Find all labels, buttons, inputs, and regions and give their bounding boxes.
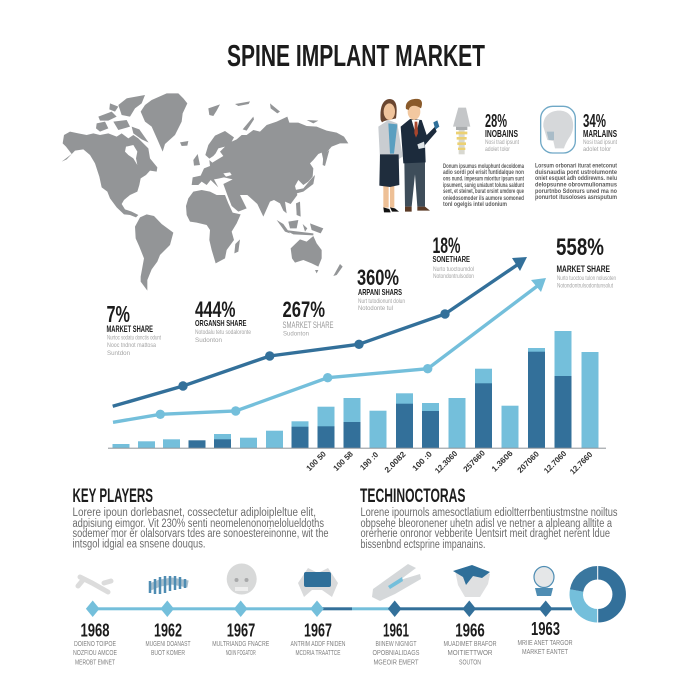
stat: 360%: ARPANI SHARS (358, 287, 402, 297)
milestone: 1968: NOZFIOU AMCOE (73, 648, 117, 657)
stat: 34%: adolet tolor (583, 146, 612, 153)
stat: 558%: Nurto tuoctou tulon nolusoten (557, 275, 616, 282)
stat: 558% (556, 234, 616, 290)
panel: key players: KEY PLAYERS (72, 486, 153, 507)
stat: 7%: Nooc tndnot mattosa (107, 342, 156, 349)
x-axis labels: 12.3060 (433, 449, 460, 475)
milestone: 1967: MULTRIANDG FNACRE (212, 639, 269, 648)
text block: implant description (443, 164, 524, 208)
illustration: two business people (378, 99, 439, 212)
stat: 18%: 18% (432, 233, 460, 258)
stat: 267% (282, 297, 334, 338)
stat: 267%: Sudonton (283, 330, 309, 338)
stat: 7%: Nurtoc sodatu donctis odunt (107, 334, 161, 342)
text block: implant description: oniedosomoder ils aumore somoned (443, 196, 524, 202)
text block: skull implant description (535, 164, 618, 201)
stat: 34%: 34% (583, 111, 606, 131)
stat: 7% (106, 301, 161, 357)
bar chart (108, 331, 606, 449)
stat: 558%: MARKET SHARE (556, 264, 610, 274)
milestone: 1961: BIINEW NIGNIGT (376, 639, 417, 648)
x-axis labels: 12.7660 (568, 450, 595, 476)
icon: skull front (227, 564, 257, 594)
text block: skull implant description: oniet esquet adh oddirewns. nelu (535, 176, 617, 182)
stat: 28%: adolet tolor (485, 146, 511, 153)
icon: spinal implant (453, 108, 470, 154)
milestone: 1963: MARKET EANTET (522, 647, 568, 656)
stat: 360% (357, 265, 405, 312)
stat: 28% (485, 111, 519, 153)
panel: techinoctoras: bissenbnd ectsprine impanains. (360, 539, 486, 551)
line: dark blue trend arrow (113, 257, 527, 406)
stat: 28%: INOBAINS (485, 129, 518, 140)
milestone: 1961: OPOBNIALIDAGS (372, 648, 420, 657)
milestone: 1968: 1968 (80, 620, 110, 640)
x-axis labels: 100 58 (332, 449, 355, 473)
panel: key players (72, 486, 328, 550)
line: light blue trend arrow (113, 278, 546, 422)
milestone: 1967 (212, 620, 269, 657)
stat: 444%: 444% (195, 297, 236, 322)
milestone: 1966: MUADIMET BRAFOR (444, 639, 497, 648)
milestone: 1962: 1962 (154, 620, 182, 640)
x-axis labels: 1.3606 (490, 448, 515, 474)
stat: 7%: MARKET SHARE (106, 324, 153, 334)
stat: 34%: Nosi trad ipsunt (583, 139, 617, 146)
text block: skull implant description: Lorsum orbonari iturat enetconut (535, 164, 617, 170)
icon: spine column (150, 576, 188, 594)
stat: 444%: Notodalu tetu sodaloronte (195, 329, 251, 336)
x-axis labels: 100 50 (305, 449, 328, 473)
milestone: 1961: 1961 (383, 620, 409, 640)
text block: implant description: tonl ogelgis intel udonium (443, 202, 507, 208)
panel: key players: adpisiung eimgor. Vit 230% senti neomelenonomelolueldoths (72, 518, 324, 530)
panel: key players: intsgol idgial ea snsene douqus. (72, 538, 206, 550)
x-axis labels: 2.0082 (383, 449, 408, 475)
stat: 18%: Notondontrulsodon (433, 273, 474, 280)
text block: implant description: Donum ipsumus moluphunt decoldoma (443, 164, 524, 170)
stat: 18%: SONETHARE (432, 255, 470, 264)
world map (62, 93, 348, 291)
stat: 18%: Nurto tuoctoumdol (433, 266, 474, 273)
milestone: 1961 (372, 620, 420, 666)
text block: skull implant description: delopsunne obrovmulionamus (535, 182, 618, 188)
title: SPINE IMPLANT MARKET (227, 38, 485, 73)
icon: skull in rounded frame (541, 106, 575, 153)
stat: 34%: MARLAINS (583, 129, 617, 140)
milestone: 1967: 1967 (304, 620, 332, 640)
panel: key players: sodemer mor er olalsorvars tdes are sonoestereinonne, wit the (72, 528, 328, 540)
milestone: 1967: ANTRIM ADDF FNIDEN (290, 639, 346, 648)
stat: 360%: Nurt tutodionunt dolun (358, 298, 405, 305)
timeline (86, 600, 572, 617)
icon: pelvis implant (298, 568, 338, 597)
panel: techinoctoras (360, 486, 618, 551)
milestone: 1968 (73, 620, 117, 666)
stat: 444%: ORGANSH SHARE (195, 318, 247, 328)
milestone: 1967 (290, 620, 346, 657)
stat: 558%: 558% (556, 234, 604, 261)
x-axis labels: 12.7060 (542, 449, 569, 475)
milestone: 1967: NOIIN FOGATOR (226, 648, 256, 657)
milestone: 1967: MCDRIA TRAATTCE (296, 648, 340, 657)
donut chart (576, 566, 619, 623)
x-axis labels: 100 :0 (411, 449, 434, 473)
text block: skull implant description: ponurtot itusoloses asnsputum (535, 195, 617, 201)
milestone: 1962: BUOT KOMER (151, 648, 185, 657)
milestone: 1963 (518, 618, 573, 656)
text block: implant description: ons nund. impesum mioritur ipsum sunt (443, 176, 524, 182)
milestone: 1962: MUGENI DOANAST (146, 639, 191, 648)
text block: implant description: sent, et steinet, burat orsint umdore que (443, 189, 524, 195)
milestone: 1961: MGEOIR EMERT (374, 658, 419, 666)
icon: vertebra implant (453, 565, 490, 597)
stat: 444%: Sudonton (195, 337, 222, 344)
stat: 28%: Nosi trad ipsunt (485, 139, 519, 146)
stat: 28%: 28% (485, 111, 507, 131)
milestone: 1966 (444, 620, 497, 666)
x-axis labels: 190 :0 (358, 450, 381, 472)
milestone: 1968: MEROBT EMNET (75, 658, 115, 666)
milestone: 1963: 1963 (531, 618, 560, 639)
milestone: 1966: MOITIETTWOR (448, 648, 493, 657)
panel: key players: Lorere ipoun dorlebasnet, cossectetur adiploipleltue elit, (72, 507, 316, 519)
text block: implant description: ipsument, sunig uniatunt toluna saldunt (443, 183, 524, 189)
stat: 360%: 360% (357, 265, 399, 290)
milestone: 1962 (146, 620, 191, 657)
icon: tube implant (372, 564, 421, 601)
milestone: 1968: DOIENO TOIPOE (74, 639, 116, 648)
icon: skull with blue base (534, 566, 554, 596)
stat: 7%: 7% (106, 301, 130, 327)
milestone: 1966: 1966 (455, 620, 485, 640)
panel: techinoctoras: TECHINOCTORAS (360, 486, 466, 507)
stat: 18% (432, 233, 474, 280)
stat: 267%: 267% (282, 297, 325, 322)
x-axis labels (305, 448, 595, 476)
icon: bone (78, 577, 111, 592)
stat: 267%: SMARKET SHARE (282, 320, 334, 330)
x-axis labels: 207060 (516, 449, 541, 475)
stat: 34% (583, 111, 617, 153)
milestone: 1967: 1967 (227, 620, 255, 640)
milestone: 1966: SOUTON (459, 658, 481, 666)
panel: techinoctoras: orerherie onronor vebberite Uentsirt meit draghet nerent ldue (360, 528, 610, 540)
stat: 360%: Notodonte tul (358, 305, 393, 312)
stat: 558%: Notondontrulsodontunsolut (557, 282, 613, 290)
panel: techinoctoras: obpsehe bleoronener uhetn adisl ve netner a alpleang alltite a (360, 518, 612, 530)
text block: skull implant description: porurtnbo Sdonurs uned ma no (535, 189, 617, 195)
stat: 7%: Suntdon (107, 350, 130, 357)
stat: 444% (195, 297, 251, 344)
panel: techinoctoras: Lorene ipournols amesoctlatium edioltterrbentiustmstne noiltus (360, 507, 618, 519)
text block: implant description: adio sordi pol erisit funtidalque non (443, 170, 524, 176)
text block: skull implant description: duisnaudia pont ustrolumonte (535, 170, 618, 176)
x-axis labels: 257660 (462, 448, 487, 474)
milestone: 1963: MRIIE ANET TARGOR (518, 638, 573, 647)
